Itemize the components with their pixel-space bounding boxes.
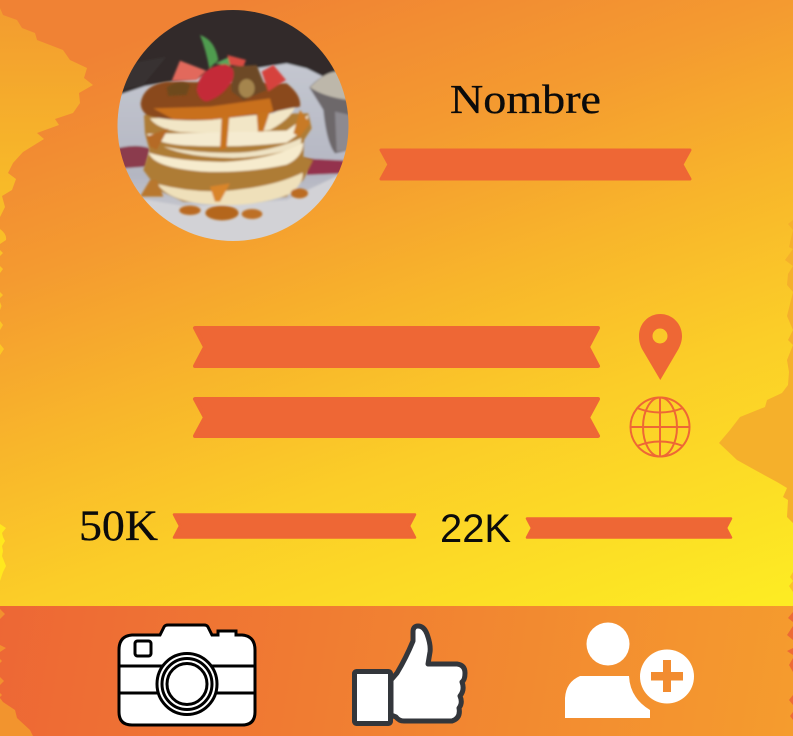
right torn edge shape <box>719 220 793 523</box>
icon: thumbs up <box>354 626 465 724</box>
profile photo: pancakes <box>118 10 348 241</box>
following ribbon <box>527 518 731 538</box>
location ribbon <box>195 328 598 366</box>
icon: add user <box>565 622 694 718</box>
followers count: 50K <box>79 503 158 550</box>
website ribbon <box>195 399 598 436</box>
following count: 22K <box>440 507 511 551</box>
name heading: Nombre <box>450 76 601 122</box>
icon: location pin <box>639 314 682 380</box>
bottom band <box>0 606 793 736</box>
followers ribbon <box>174 514 415 538</box>
left torn edge shape <box>0 8 93 581</box>
icon: camera <box>119 625 255 725</box>
name ribbon <box>381 150 690 179</box>
icon: globe <box>630 397 690 457</box>
